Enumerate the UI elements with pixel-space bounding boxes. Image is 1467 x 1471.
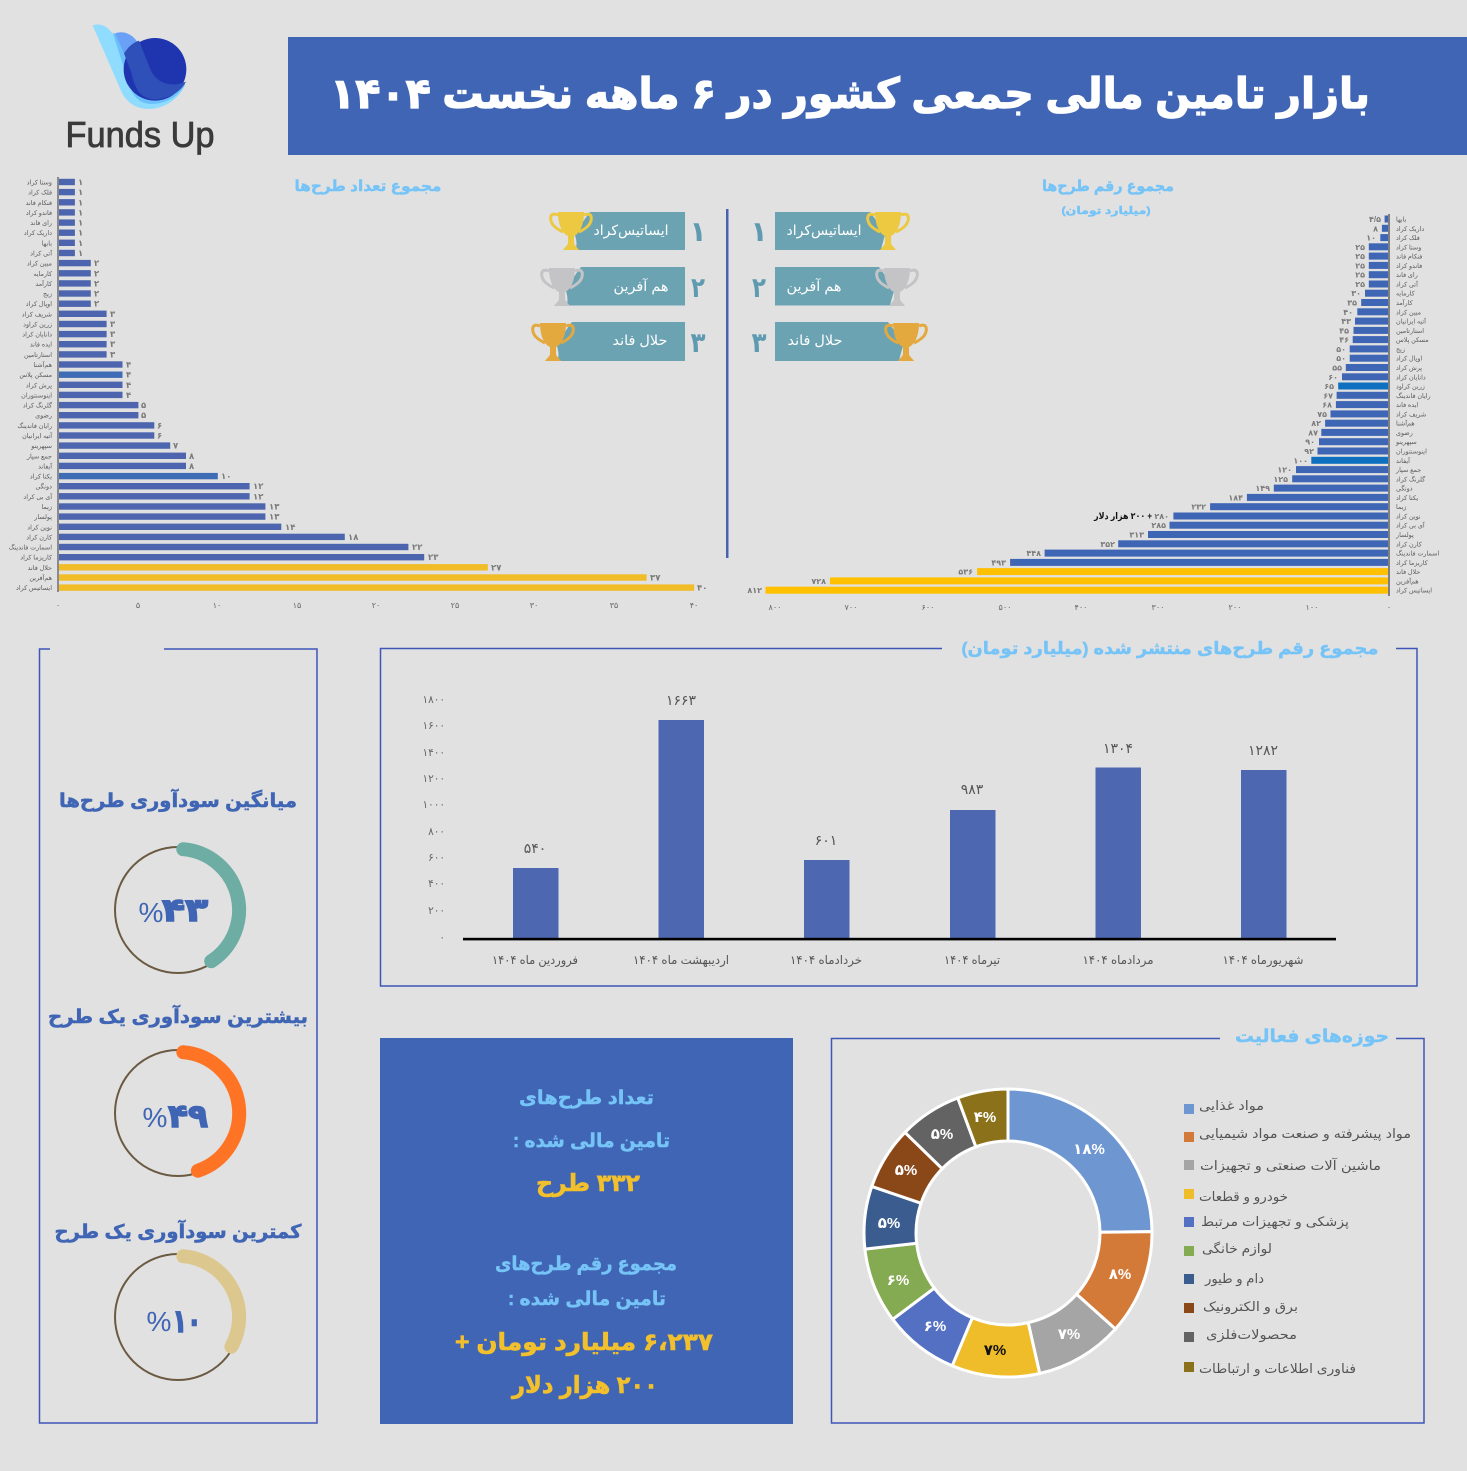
platform names: فنکام فاند <box>1396 254 1422 261</box>
value labels: ۴۶ <box>1339 336 1349 345</box>
platform names: کارمایه <box>33 271 53 278</box>
x axis labels: ۶۰۰ <box>922 603 934 612</box>
panel: monthly funded amount <box>380 639 1417 986</box>
gauge: 10 percent: ۱۰ <box>172 1303 202 1339</box>
value labels: ۱ <box>78 248 83 258</box>
total amount <box>455 1254 713 1399</box>
callout: plus 200 thousand dollars: + ۲۰۰ هزار دلار <box>1093 511 1152 522</box>
month labels <box>492 953 1303 968</box>
x axis labels: ۰ <box>56 601 60 610</box>
platform names: دانایان کراد <box>22 332 52 339</box>
x axis labels: ۱۰۰ <box>1306 603 1318 612</box>
gauge: 49 percent: % <box>143 1102 167 1133</box>
platform names: فاندو کراد <box>26 210 52 217</box>
y axis labels: ۴۰۰ <box>428 878 445 890</box>
platform names: ایساتیس کراد <box>16 585 52 592</box>
value labels: ۴ <box>126 390 131 400</box>
column values: ۱۳۰۴ <box>1103 740 1133 756</box>
platform names: آی بی کراد <box>1396 521 1426 530</box>
total amount: ۶،۲۳۷ میلیارد تومان + <box>455 1329 713 1356</box>
month labels: مردادماه ۱۴۰۴ <box>1082 953 1154 968</box>
value labels: ۳۷ <box>650 572 661 582</box>
total count <box>513 1088 670 1197</box>
title: بازار تامین مالی جمعی کشور در ۶ ماهه نخست ۱۴۰۴ <box>330 70 1370 119</box>
platform names: اینوسنتوران <box>21 392 52 399</box>
month labels: تیرماه ۱۴۰۴ <box>944 953 1000 968</box>
platform names: زیج <box>43 291 52 298</box>
platform names: آی بی کراد <box>23 492 53 501</box>
month labels: خردادماه ۱۴۰۴ <box>790 953 862 968</box>
legend: مواد پیشرفته و صنعت مواد شیمیایی <box>1199 1126 1411 1142</box>
value labels: ۷۲۸ <box>811 577 826 586</box>
panel: totals <box>380 1038 793 1424</box>
value labels: ۱ <box>78 238 83 248</box>
logo mark <box>93 24 186 109</box>
platform names: رایان فاندینگ <box>17 422 52 430</box>
panel heading: حوزه‌های فعالیت <box>1235 1026 1389 1047</box>
heading: total project count: مجموع تعداد طرح‌ها <box>294 178 442 195</box>
platform names: هم‌آشنا <box>33 360 52 369</box>
total amount: ۲۰۰ هزار دلار <box>511 1372 658 1399</box>
donut percentages: ۵% <box>878 1215 900 1232</box>
gauge: 10 percent: % <box>147 1306 171 1337</box>
platform names: شریف کراد <box>22 311 52 318</box>
legend: برق و الکترونیک <box>1203 1299 1298 1315</box>
y axis labels: ۱۰۰۰ <box>422 799 445 811</box>
total count: تامین مالی شده : <box>513 1131 670 1152</box>
value labels: ۵۰ <box>1336 345 1346 354</box>
month labels: اردیبهشت ماه ۱۴۰۴ <box>633 953 729 968</box>
gauge: 49 percent: ۴۹ <box>168 1098 208 1134</box>
platform names: نوین کراد <box>1396 514 1421 520</box>
bars <box>766 216 1388 594</box>
value labels: ۱۳ <box>269 512 280 522</box>
gauge: 10 percent <box>115 1254 241 1380</box>
platform names: بابها <box>1396 216 1407 224</box>
rank 2: هم آفرین <box>614 278 668 295</box>
panel heading: مجموع رقم طرح‌های منتشر شده (میلیارد تومان) <box>962 639 1378 659</box>
value labels: ۴/۵ <box>1369 215 1381 224</box>
month labels: فروردین ماه ۱۴۰۴ <box>492 953 578 968</box>
value labels: ۲ <box>94 299 100 309</box>
value labels: ۱۲۵ <box>1273 475 1288 484</box>
value labels: ۱۲۰ <box>1277 466 1292 475</box>
platform names: جمع سپار <box>1395 467 1421 474</box>
legend: ماشین آلات صنعتی و تجهیزات <box>1200 1157 1381 1174</box>
value labels: ۲۸۰ <box>1154 512 1169 521</box>
y axis labels: ۶۰۰ <box>428 852 445 864</box>
platform names: گلرنگ کراد <box>23 402 53 410</box>
value labels: ۴۴۸ <box>1026 549 1041 558</box>
platform names: اسمارت فاندینگ <box>1396 550 1439 558</box>
y axis labels: ۱۶۰۰ <box>422 720 445 732</box>
value labels: ۱۰ <box>221 471 231 481</box>
platform names: وستا کراد <box>1396 244 1421 251</box>
value labels: ۴۳ <box>1341 317 1351 326</box>
value labels: ۱۴ <box>285 522 295 532</box>
x axis labels <box>769 603 1391 612</box>
platform names: پولسار <box>33 514 52 521</box>
donut percentages: ۵% <box>931 1126 953 1143</box>
value labels: ۸ <box>189 451 195 461</box>
rank 3: ۳ <box>752 327 766 358</box>
platform names: سپهرینو <box>1395 439 1417 446</box>
rank 2: ۲ <box>691 272 705 303</box>
y axis labels: ۱۸۰۰ <box>422 694 445 706</box>
legend: لوازم خانگی <box>1202 1241 1272 1257</box>
heading: lowest profitability: کمترین سودآوری یک طرح <box>54 1219 302 1243</box>
platform names: دونگی <box>35 483 52 491</box>
y axis labels: ۰ <box>439 932 445 944</box>
value labels: ۱ <box>78 197 83 207</box>
value labels: ۶ <box>157 420 162 430</box>
platform names: رضوی <box>1396 430 1413 437</box>
total count: تعداد طرح‌های <box>519 1088 654 1109</box>
value labels: ۶ <box>157 430 162 440</box>
heading: highest profitability: بیشترین سودآوری یک طرح <box>48 1004 308 1028</box>
value labels: ۴۹۳ <box>991 558 1006 567</box>
platform names: کارن کراد <box>26 534 53 541</box>
value labels: ۱۳ <box>269 502 280 512</box>
month labels: شهریورماه ۱۴۰۴ <box>1222 953 1304 968</box>
logo wordmark: Funds Up <box>66 114 214 155</box>
value labels <box>747 215 1381 595</box>
y axis labels: ۸۰۰ <box>428 826 445 838</box>
donut percentages: ۸% <box>1109 1266 1131 1283</box>
platform names: اسمارت فاندینگ <box>9 544 52 552</box>
value labels: ۴۰ <box>697 583 707 593</box>
panel: activity sectors <box>832 1026 1424 1423</box>
platform names: سپهرینو <box>30 443 52 450</box>
donut percentages: ۷% <box>984 1342 1006 1359</box>
platform names: ایساتیس کراد <box>1396 588 1432 595</box>
column values: ۱۲۸۲ <box>1248 742 1278 758</box>
platform names: رضوی <box>35 413 52 420</box>
platform names: هم‌آشنا <box>1396 419 1415 428</box>
platform names: اوپال کراد <box>26 301 52 308</box>
rank 1: ایساتیس‌کراد <box>594 222 668 239</box>
gauge: 43 percent: ۴۳ <box>162 892 209 928</box>
platform names: یکتا کراد <box>1396 495 1418 502</box>
platform names: رای فاند <box>30 220 52 227</box>
value labels: ۳۵ <box>1347 298 1357 308</box>
value labels <box>78 177 707 593</box>
x axis labels: ۲۰ <box>372 601 380 610</box>
platform names: کارآمد <box>35 279 53 288</box>
value labels: ۸۷ <box>1308 428 1318 437</box>
rank 1: ۱ <box>750 216 768 247</box>
value labels: ۸۱۲ <box>747 586 762 595</box>
platform names: استارتامین <box>1396 328 1424 335</box>
platform names: فلک کراد <box>1396 235 1420 242</box>
value labels: ۱۸۴ <box>1228 493 1243 502</box>
gauge: 43 percent: % <box>139 897 163 928</box>
value labels: ۳ <box>110 349 116 359</box>
rank 1: ۱ <box>689 216 707 247</box>
platform names: دونگی <box>1396 485 1413 493</box>
platform names: وستا کراد <box>27 180 52 186</box>
value labels: ۲ <box>94 258 100 268</box>
platform names: یکتا کراد <box>30 474 52 481</box>
platform names: ایده فاند <box>30 342 52 349</box>
y axis labels: ۲۰۰ <box>428 905 445 917</box>
heading: total project amount <box>1042 178 1174 217</box>
panel: top three by project count <box>533 212 707 361</box>
legend <box>1184 1098 1411 1377</box>
value labels: ۲۸۵ <box>1151 521 1166 530</box>
platform names: کارمایه <box>1396 291 1416 298</box>
platform names: آتیه ایرانیان <box>22 431 53 440</box>
value labels: ۵۳۶ <box>958 568 973 577</box>
legend: محصولات‌فلزی <box>1206 1327 1297 1343</box>
value labels: ۱ <box>78 228 83 238</box>
x axis labels: ۴۰ <box>690 601 698 610</box>
y axis labels: ۱۴۰۰ <box>422 747 445 759</box>
x axis labels: ۷۰۰ <box>845 603 857 612</box>
platform names: اینوسنتوران <box>1396 448 1427 456</box>
value labels: ۲ <box>94 278 100 288</box>
value labels: ۴ <box>126 380 131 390</box>
value labels: ۸ <box>1373 224 1378 233</box>
platform names: رای فاند <box>1396 272 1418 279</box>
platform names: مبین کراد <box>27 261 52 268</box>
panel: top three by amount <box>750 212 926 361</box>
legend: فناوری اطلاعات و ارتباطات <box>1199 1361 1356 1377</box>
value labels: ۵۰ <box>1336 354 1346 363</box>
value labels: ۲ <box>94 268 100 278</box>
value labels: ۲۳ <box>428 552 439 562</box>
platform names: فنکام فاند <box>26 200 52 207</box>
value labels: ۴۰ <box>1343 308 1353 317</box>
panel: profitability <box>40 649 317 1423</box>
value labels: ۴ <box>126 360 131 370</box>
value labels: ۴۵ <box>1339 326 1349 335</box>
right bar chart: project amount by platform <box>747 214 1439 612</box>
platform names <box>1395 216 1439 595</box>
donut percentages: ۶% <box>887 1272 909 1289</box>
legend: مواد غذایی <box>1199 1098 1264 1114</box>
rank 3 <box>533 322 706 361</box>
column values: ۱۶۶۳ <box>666 692 697 708</box>
donut percentages: ۴% <box>974 1109 996 1126</box>
platform names: بابها <box>42 240 52 247</box>
platform names: آتی کراد <box>1396 280 1419 288</box>
platform names: زیج <box>1396 346 1405 353</box>
value labels: ۳ <box>110 339 116 349</box>
value labels: ۲۲ <box>412 542 423 552</box>
donut percentages: ۶% <box>924 1318 946 1335</box>
heading: average profitability: میانگین سودآوری طرح‌ها <box>59 788 297 812</box>
column values <box>524 692 1278 856</box>
rank 2 <box>752 267 917 306</box>
x axis labels: ۳۰۰ <box>1152 603 1164 612</box>
platform names: زیما <box>41 504 52 511</box>
platform names: زرین کراود <box>1396 384 1425 390</box>
column values: ۹۸۳ <box>961 781 984 797</box>
value labels: ۱ <box>78 218 83 228</box>
x axis labels: ۳۵ <box>610 601 618 610</box>
x axis labels: ۵ <box>136 601 140 610</box>
value labels: ۶۸ <box>1322 401 1332 410</box>
value labels: ۲۵ <box>1355 261 1365 270</box>
platform names: مبین کراد <box>1396 309 1421 316</box>
rank 3: ۳ <box>690 327 706 358</box>
rank 2: هم آفرین <box>786 278 842 295</box>
gauge: 43 percent <box>115 847 241 973</box>
logo: Funds Up <box>66 24 214 155</box>
donut percentages <box>878 1109 1131 1359</box>
donut percentages: ۷% <box>1058 1326 1080 1343</box>
platform names: کارن کراد <box>1396 541 1423 548</box>
value labels: ۳۱۳ <box>1129 530 1144 540</box>
value labels: ۶۷ <box>1323 391 1333 400</box>
value labels: ۷ <box>173 441 179 451</box>
y axis labels: ۱۲۰۰ <box>422 773 445 785</box>
legend: پزشکی و تجهیزات مرتبط <box>1201 1214 1349 1230</box>
x axis labels: ۲۵ <box>451 601 459 610</box>
title banner <box>288 37 1467 155</box>
rank 1 <box>750 212 908 250</box>
rank 3: حلال فاند <box>612 332 668 348</box>
value labels: ۲ <box>94 288 100 298</box>
platform names: دانایان کراد <box>1396 374 1426 381</box>
platform names: رایان فاندینگ <box>1396 392 1431 400</box>
x axis labels: ۱۵ <box>293 601 301 610</box>
platform names: پولسار <box>1395 532 1414 539</box>
x axis labels: ۱۰ <box>213 601 221 610</box>
value labels: ۲۵ <box>1355 280 1365 289</box>
value labels: ۱ <box>78 177 83 187</box>
x axis labels: ۳۰ <box>530 601 538 610</box>
platform names: مسکن پلاس <box>1396 337 1429 344</box>
left bar chart: project count by platform <box>9 177 707 610</box>
x axis labels: ۲۰۰ <box>1229 603 1241 612</box>
value labels: ۲۵ <box>1355 252 1365 261</box>
value labels: ۱۲ <box>253 481 264 491</box>
platform names: مسکن پلاس <box>19 372 52 379</box>
value labels: ۱۰۰ <box>1293 456 1308 465</box>
value labels: ۶۵ <box>1324 382 1334 391</box>
platform names: زرین کراود <box>23 322 52 328</box>
legend: خودرو و قطعات <box>1199 1189 1288 1205</box>
rank 1 <box>551 212 707 250</box>
x axis labels: ۵۰۰ <box>999 603 1011 612</box>
bars <box>59 179 694 591</box>
value labels: ۱۰ <box>1366 234 1376 243</box>
value labels: ۸ <box>189 461 195 471</box>
value labels: ۳ <box>110 329 116 339</box>
platform names: پرش کراد <box>26 382 52 389</box>
total amount: تامین مالی شده : <box>508 1289 666 1310</box>
value labels: ۵۵ <box>1332 364 1342 372</box>
value labels: ۲۳۲ <box>1191 503 1206 512</box>
platform names: حلال فاند <box>1396 569 1420 576</box>
total count: ۳۳۲ طرح <box>536 1170 640 1197</box>
platform names: گلرنگ کراد <box>1396 475 1426 483</box>
x axis labels: ۴۰۰ <box>1075 603 1087 612</box>
rank 2: ۲ <box>752 272 766 303</box>
value labels: ۶۰ <box>1328 373 1338 382</box>
platform names: پرش کراد <box>1396 365 1422 372</box>
donut chart <box>864 1089 1152 1377</box>
platform names: آتی کراد <box>30 248 53 258</box>
platform names: حلال فاند <box>28 565 52 572</box>
rank 2 <box>542 267 705 306</box>
value labels: ۴ <box>126 370 131 380</box>
platform names: جمع سپار <box>26 453 52 460</box>
value labels: ۱ <box>78 187 83 197</box>
rank 1: ایساتیس‌کراد <box>786 222 862 239</box>
unit note: (میلیارد تومان) <box>1062 205 1150 217</box>
platform names: اوپال کراد <box>1396 356 1422 363</box>
x axis labels: ۰ <box>1387 603 1391 612</box>
platform names: زیما <box>1396 504 1407 511</box>
platform names: هم‌آفرین <box>29 573 52 582</box>
column values: ۶۰۱ <box>815 832 837 848</box>
value labels: ۲۵ <box>1355 271 1365 280</box>
value labels: ۹۰ <box>1305 438 1315 447</box>
platform names: داریک کراد <box>1396 226 1424 233</box>
columns <box>513 720 1286 939</box>
platform names: فلک کراد <box>28 190 52 197</box>
y axis labels <box>422 694 445 944</box>
value labels: ۲۷ <box>491 562 502 572</box>
value labels: ۱۴۹ <box>1255 484 1270 493</box>
column values: ۵۴۰ <box>524 840 546 856</box>
value labels: ۵ <box>141 400 146 410</box>
platform names: فاندو کراد <box>1396 263 1422 270</box>
platform names: استارتامین <box>24 352 52 359</box>
platform names: نوین کراد <box>27 524 52 531</box>
platform names: هم‌آفرین <box>1396 576 1419 585</box>
platform names: آیفاند <box>38 461 53 470</box>
platform names <box>9 180 53 592</box>
platform names: آیفاند <box>1396 456 1411 465</box>
heading: total project amount: مجموع رقم طرح‌ها <box>1042 178 1174 195</box>
gauge: 49 percent <box>115 1050 241 1176</box>
platform names: ایده فاند <box>1396 402 1418 409</box>
value labels: ۲۵ <box>1355 243 1365 252</box>
legend: دام و طیور <box>1204 1271 1264 1287</box>
platform names: کاریزما کراد <box>1396 560 1429 567</box>
platform names: شریف کراد <box>1396 411 1426 418</box>
x axis labels <box>56 601 698 610</box>
value labels: ۸۲ <box>1311 419 1321 428</box>
value labels: ۳ <box>110 319 116 329</box>
platform names: کاریزما کراد <box>20 555 53 562</box>
x axis labels: ۸۰۰ <box>769 603 781 612</box>
donut percentages: ۵% <box>895 1162 917 1179</box>
rank 3: حلال فاند <box>788 332 842 348</box>
value labels: ۵ <box>141 410 146 420</box>
value labels: ۳۰ <box>1351 289 1361 298</box>
platform names: داریک کراد <box>24 230 52 237</box>
rank 3 <box>752 322 926 361</box>
value labels: ۷۵ <box>1317 410 1327 419</box>
total amount: مجموع رقم طرح‌های <box>495 1254 677 1275</box>
value labels: ۳ <box>110 309 116 319</box>
platform names: آتیه ایرانیان <box>1396 317 1427 326</box>
value labels: ۳۵۲ <box>1100 540 1115 549</box>
value labels: ۹۲ <box>1304 447 1314 456</box>
value labels: ۱ <box>78 207 83 217</box>
value labels: ۱۲ <box>253 491 264 501</box>
value labels: ۱۸ <box>348 532 359 542</box>
donut percentages: ۱۸% <box>1073 1141 1105 1158</box>
platform names: کارآمد <box>1396 298 1414 307</box>
